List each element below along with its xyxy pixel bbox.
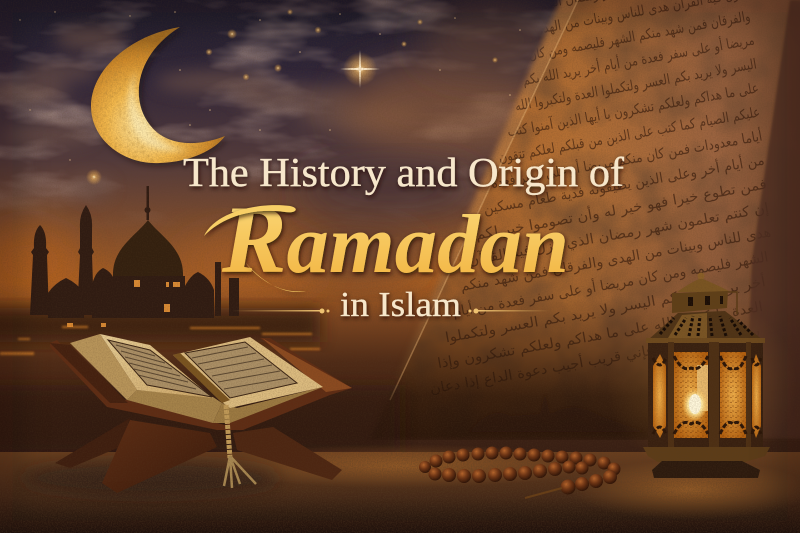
lantern finial and collar xyxy=(698,272,704,280)
lantern base xyxy=(643,447,770,462)
manuscript left page strip xyxy=(414,0,577,346)
manuscript parchment xyxy=(390,0,800,440)
lantern panel ornaments xyxy=(653,356,761,434)
manuscript arabic script lines: الشهر فليصمه ومن كان مريضا أو على سفر فعدة من أيام xyxy=(451,247,770,321)
book pages xyxy=(70,334,323,423)
oil lantern xyxy=(607,272,797,478)
manuscript arabic script lines: سألك عبادي عني فإني قريب أجيب دعوة الداع إذا دعان xyxy=(428,321,761,398)
main dome xyxy=(113,220,183,276)
city lights xyxy=(0,326,320,355)
manuscript arabic script lines: من أيام أخر وعلى الذين يطيقونه فدية طعام مسكين xyxy=(482,150,766,218)
crescent moon xyxy=(91,27,226,168)
manuscript arabic script lines: العدة ولتكبروا الله على ما هداكم ولعلكم تشكرون وإذا xyxy=(436,299,764,372)
printed page text xyxy=(108,340,212,397)
lantern glass panels xyxy=(653,354,666,438)
manuscript arabic script lines: أخر يريد الله بكم اليسر ولا يريد بكم العسر ولتكملوا xyxy=(444,272,767,346)
ornament left xyxy=(232,308,330,314)
minaret left xyxy=(30,225,49,315)
manuscript arabic script lines: إن كنتم تعلمون شهر رمضان الذي أنزل فيه القرآن xyxy=(467,198,770,269)
clouds xyxy=(0,0,600,298)
distant horizon city silhouette xyxy=(470,394,645,432)
lantern frame xyxy=(648,340,763,452)
title line 1: The History and Origin of xyxy=(183,149,624,195)
ribbon tassel xyxy=(224,405,256,488)
title line 2: Ramadan: Ramadan xyxy=(221,186,569,293)
wooden table xyxy=(0,444,800,533)
stand legs xyxy=(55,418,342,493)
prayer beads xyxy=(419,446,620,498)
lit windows xyxy=(67,280,180,327)
ornament right xyxy=(468,308,550,314)
stars xyxy=(19,9,521,185)
lantern dome xyxy=(648,311,763,340)
manuscript arabic script lines xyxy=(432,0,770,395)
quran on wooden stand xyxy=(50,334,352,493)
lantern flame xyxy=(682,386,708,420)
manuscript arabic script lines: هدى للناس وبينات من الهدى والفرقان فمن شهد منكم xyxy=(459,224,772,295)
title line 3: in Islam xyxy=(340,285,461,324)
ground band xyxy=(0,308,320,342)
small domes and hall xyxy=(48,278,84,318)
manuscript arabic script lines: فمن تطوع خيرا فهو خير له وأن تصوموا خير لكم xyxy=(474,174,768,243)
minaret center xyxy=(77,205,94,315)
table-side wash xyxy=(0,385,400,455)
stand cradle xyxy=(50,338,352,430)
manuscript arabic script lines: أياما معدودات فمن كان منكم مريضا أو على سفر فعدة xyxy=(490,126,764,192)
mosque silhouette xyxy=(0,186,320,342)
R swash xyxy=(204,205,306,292)
manuscript page edges xyxy=(745,0,800,440)
